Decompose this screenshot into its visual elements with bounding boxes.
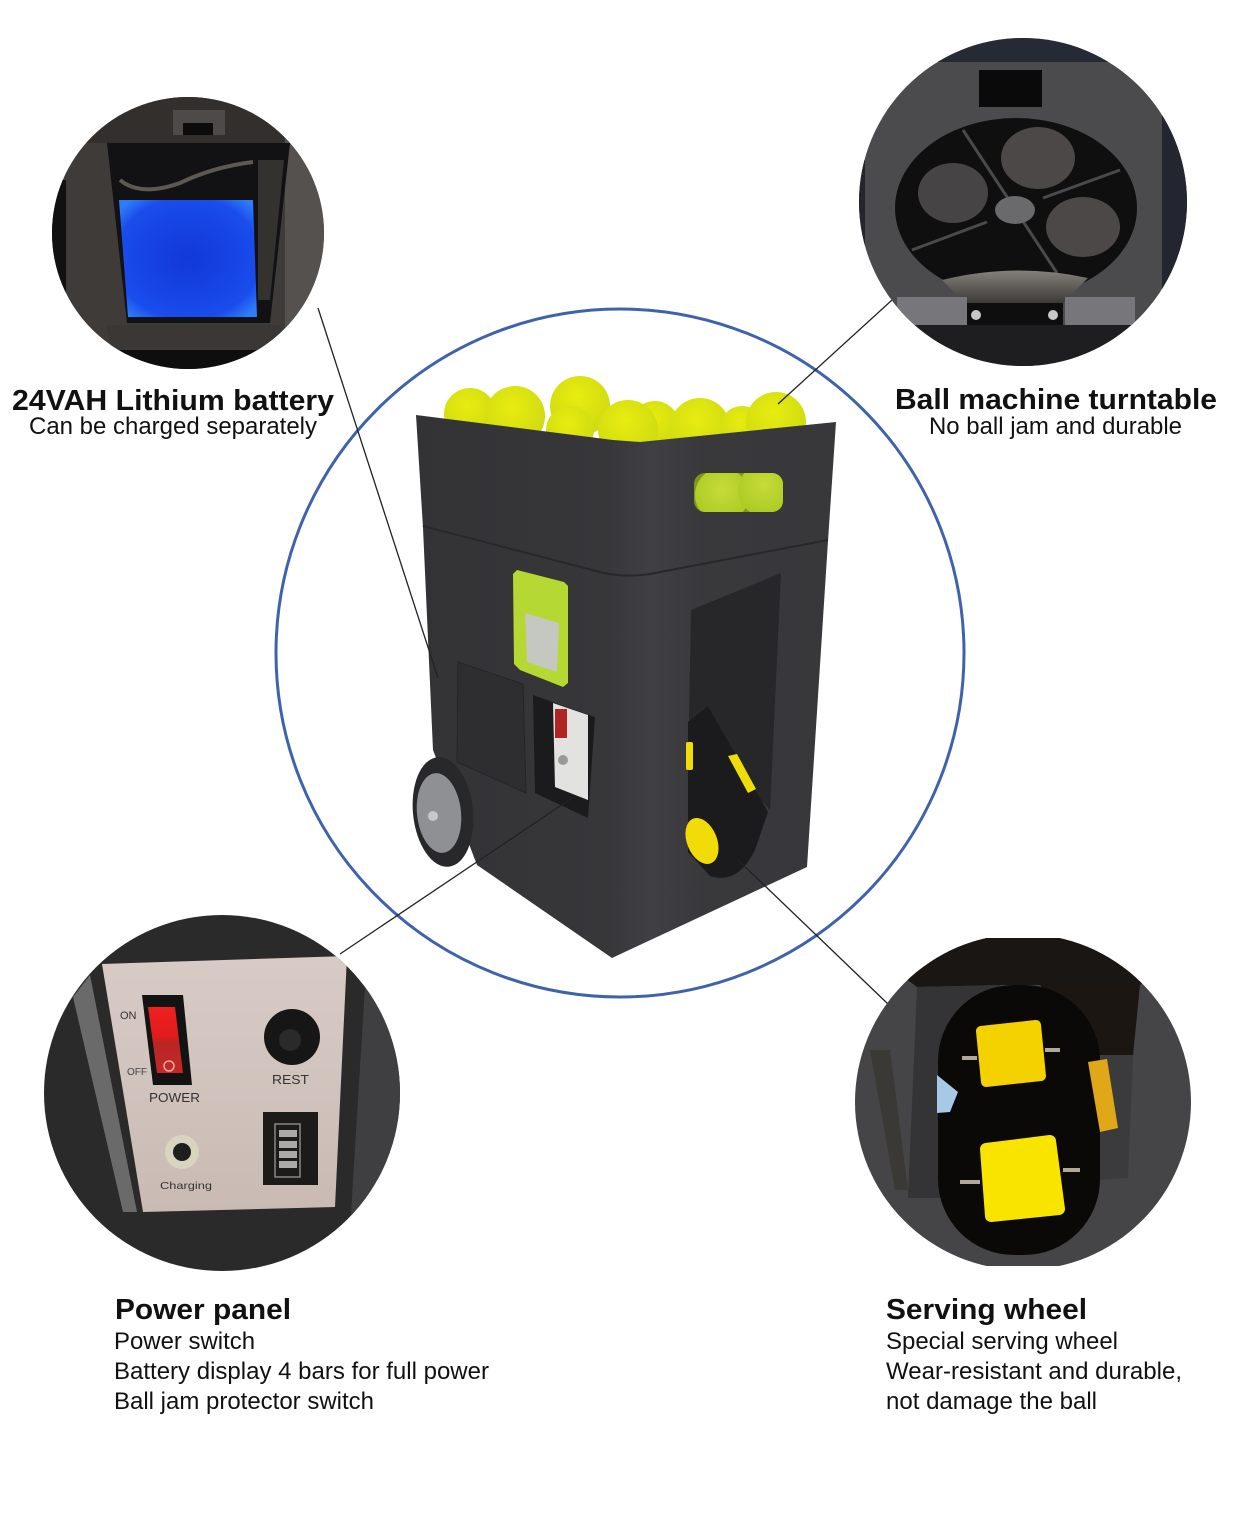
text: power panel details [114, 1328, 489, 1415]
charging port [165, 1135, 199, 1169]
panel: serving wheel photo [850, 938, 1196, 1266]
panel labels: ON [120, 1010, 137, 1022]
battery level display [263, 1112, 318, 1185]
panel labels: REST [272, 1072, 309, 1087]
heading: battery: 24VAH Lithium battery [12, 385, 334, 417]
text: serving wheel details [886, 1328, 1182, 1415]
leader line: battery [318, 308, 438, 678]
tennis balls in hopper [444, 376, 806, 460]
text: power panel details: Power switch [114, 1328, 255, 1355]
panel labels: OFF [127, 1067, 147, 1078]
power panel on machine [533, 695, 595, 818]
feed mechanism with yellow rollers [679, 706, 768, 878]
machine body [416, 415, 836, 958]
text: power panel details: Ball jam protector switch [114, 1388, 374, 1415]
text: serving wheel details: not damage the ball [886, 1388, 1097, 1415]
power rocker switch [142, 995, 192, 1085]
text: battery note: Can be charged separately [29, 413, 317, 440]
big blue circle [276, 309, 964, 997]
panel labels [120, 1010, 309, 1192]
carry handle with balls [694, 473, 783, 512]
text: turntable note: No ball jam and durable [929, 413, 1182, 440]
panel labels: POWER [149, 1090, 200, 1105]
rear wheel [407, 754, 479, 870]
heading: serving wheel: Serving wheel [886, 1294, 1087, 1326]
ball outlet opening [689, 573, 781, 810]
green QR sticker [513, 570, 568, 687]
text: power panel details: Battery display 4 bars for full power [114, 1358, 489, 1385]
tennis ball machine [407, 376, 836, 958]
panel: battery photo [50, 95, 330, 372]
panel labels: Charging [160, 1180, 212, 1192]
leader line: turntable [778, 300, 892, 404]
leader line: serving wheel [738, 860, 888, 1004]
panel: power panel photo [42, 912, 402, 1274]
text: serving wheel details: Wear-resistant and durable, [886, 1358, 1182, 1385]
leader line: power panel [340, 798, 572, 954]
battery compartment door [457, 662, 526, 793]
text: serving wheel details: Special serving wheel [886, 1328, 1118, 1355]
panel: turntable photo [855, 35, 1192, 372]
rest knob [264, 1009, 320, 1065]
heading: power panel: Power panel [115, 1294, 291, 1326]
heading: turntable: Ball machine turntable [895, 384, 1217, 416]
